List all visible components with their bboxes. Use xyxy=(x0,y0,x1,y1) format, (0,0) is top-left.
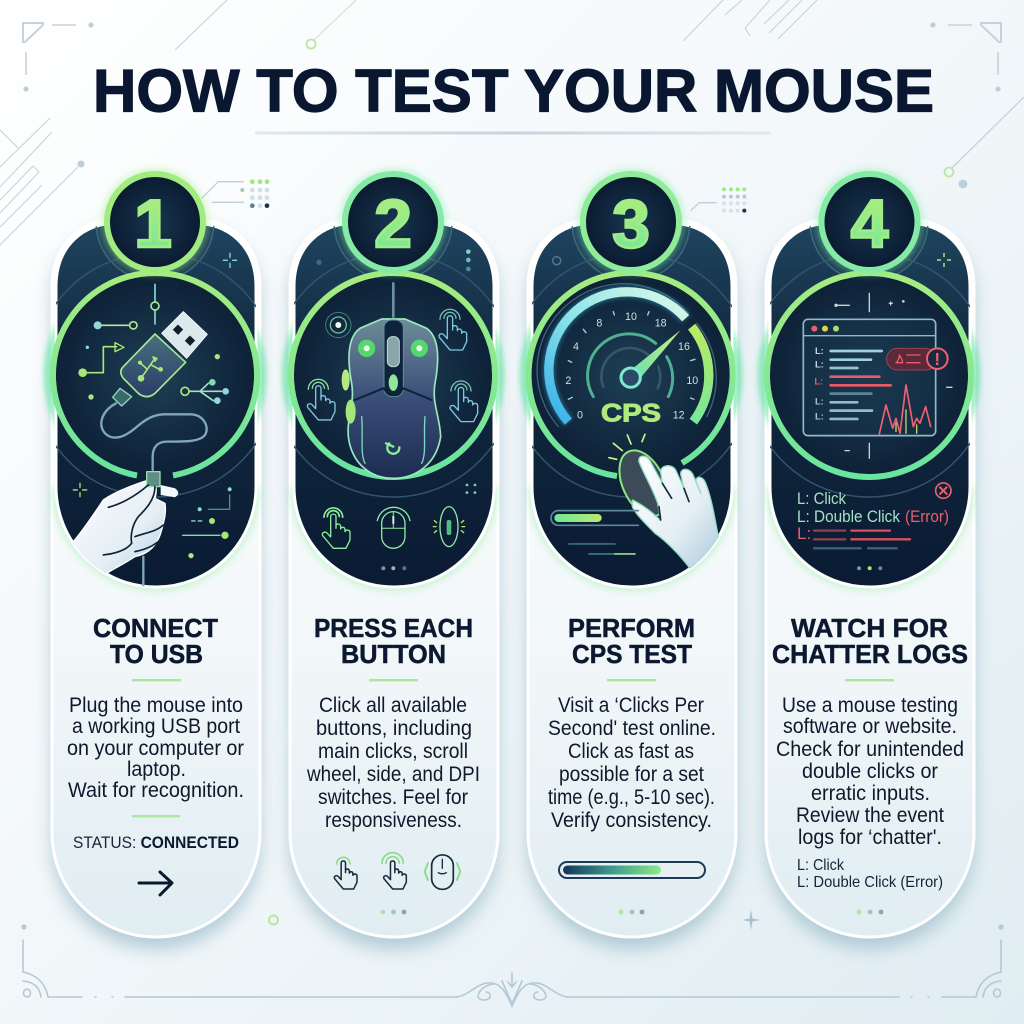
body text: step 1: a working USB port xyxy=(72,715,240,738)
chart: CPS speedometer gauge xyxy=(537,284,716,427)
body text: step 1: laptop. xyxy=(127,758,186,781)
heading: watch for chatter logs: CHATTER LOGS xyxy=(772,639,968,669)
icon: log window with error xyxy=(803,293,952,458)
body text: step 3: possible for a set xyxy=(559,763,704,786)
chart: CPS speedometer gauge: 16 xyxy=(678,341,690,353)
body text: step 3: time (e.g., 5-10 sec). xyxy=(548,786,715,809)
body text: step 4: Use a mouse testing xyxy=(782,694,958,717)
body text: step 4: software or website. xyxy=(783,715,957,738)
chart: CPS speedometer gauge: 18 xyxy=(655,318,667,330)
body text: step 4: double clicks or xyxy=(802,760,938,783)
heading: perform CPS test: PERFORM xyxy=(568,613,695,643)
body text: step 2: buttons, including xyxy=(316,717,472,740)
decoration: dots grid beside badge 3 xyxy=(691,187,746,213)
badge: number 4 xyxy=(816,169,922,275)
heading: watch for chatter logs xyxy=(772,613,968,669)
heading: connect to USB: CONNECT xyxy=(93,613,218,643)
icon: log window with error: ! xyxy=(934,349,940,369)
badge: number 4: 4 xyxy=(851,186,889,262)
heading: press each button: PRESS EACH xyxy=(314,613,473,643)
icon: arrow xyxy=(139,872,172,895)
badge: number 1: 1 xyxy=(134,186,172,262)
body text: step 4: Review the event xyxy=(796,804,944,827)
body text: step 4 xyxy=(776,694,964,849)
icon: error cross and log bars xyxy=(814,483,951,570)
body text: step 3: Second' test online. xyxy=(548,717,716,740)
icon: log window with error: L: xyxy=(815,359,824,369)
divider xyxy=(132,815,180,817)
decoration: bottom ring and sparkle xyxy=(269,910,760,930)
body text: step 1: Plug the mouse into xyxy=(69,694,243,717)
chart: CPS speedometer gauge: 0 xyxy=(577,409,583,421)
body text: step 2: responsiveness. xyxy=(325,809,462,832)
log text in dark panel: L: Double Click xyxy=(797,507,900,526)
chart: CPS speedometer gauge: 4 xyxy=(573,341,579,353)
log text in dark panel: L: xyxy=(797,524,811,543)
icon: log window with error: L: xyxy=(815,397,824,407)
icons: hands and mouse row xyxy=(334,853,460,889)
chart: CPS speedometer gauge: 8 xyxy=(596,318,602,330)
title: HOW TO TEST YOUR MOUSE xyxy=(93,58,934,124)
icon: log window with error: L: xyxy=(815,346,824,356)
badge: number 3: 3 xyxy=(612,186,650,262)
log sample text: L: Double Click (Error) xyxy=(797,874,943,891)
log text in dark panel: L: Click xyxy=(797,489,846,508)
heading: connect to USB xyxy=(93,613,218,669)
heading: press each button xyxy=(314,613,473,669)
decoration: bottom ornamental frame xyxy=(22,925,1003,1006)
heading: perform CPS test: CPS TEST xyxy=(572,639,692,669)
log text in dark panel xyxy=(797,489,949,543)
body text: step 4: logs for ‘chatter'. xyxy=(798,826,942,849)
chart: CPS speedometer gauge: 10 xyxy=(625,311,637,323)
pagination dots xyxy=(381,910,406,914)
divider xyxy=(369,679,418,681)
body text: step 3: Click as fast as xyxy=(568,740,694,763)
log sample text xyxy=(797,857,943,891)
badge: number 1 xyxy=(102,169,208,275)
body text: step 1: Wait for recognition. xyxy=(68,779,244,802)
status line: STATUS: CONNECTED xyxy=(73,834,239,852)
panel 4: watch for chatter logs xyxy=(747,163,991,949)
badge: number 3 xyxy=(578,169,684,275)
icon: hand clicking mouse xyxy=(551,257,719,568)
badge: number 2 xyxy=(340,169,446,275)
icon: USB plug illustration xyxy=(60,253,237,590)
chart: CPS speedometer gauge: 12 xyxy=(673,409,685,421)
panel 2: press each button xyxy=(271,163,515,949)
icon: log window with error: L: xyxy=(814,376,823,386)
progress bar xyxy=(559,862,705,878)
icon: gaming mouse illustration xyxy=(307,249,478,570)
pagination dots xyxy=(619,910,644,914)
body text: step 3: Verify consistency. xyxy=(551,809,712,832)
badge: number 2: 2 xyxy=(374,186,412,262)
title underline xyxy=(255,132,770,134)
divider xyxy=(845,679,894,681)
decoration: top-left corner circuit xyxy=(0,0,356,245)
divider xyxy=(132,679,181,681)
divider xyxy=(607,679,656,681)
body text: step 4: erratic inputs. xyxy=(811,782,930,805)
decoration: top-right corner circuit xyxy=(683,0,1024,188)
gauge label: CPS: CPS xyxy=(601,400,661,428)
icon: sparkle xyxy=(937,253,951,267)
heading: connect to USB: TO USB xyxy=(110,639,203,669)
heading: perform CPS test xyxy=(568,613,695,669)
heading: press each button: BUTTON xyxy=(341,639,446,669)
log text in dark panel: (Error) xyxy=(905,507,949,526)
decoration: dots grid beside badge 1 xyxy=(202,179,269,208)
body text: step 3 xyxy=(548,694,716,832)
panel 3: perform CPS test xyxy=(509,163,753,949)
chart: CPS speedometer gauge: 2 xyxy=(565,375,571,387)
chart: CPS speedometer gauge: 10 xyxy=(686,375,698,387)
log sample text: L: Click xyxy=(797,857,845,874)
body text: step 2: Click all available xyxy=(319,694,467,717)
body text: step 1: on your computer or xyxy=(67,737,244,760)
icon: log window with error: L: xyxy=(815,411,824,421)
body text: step 2 xyxy=(306,694,480,832)
body text: step 2: switches. Feel for xyxy=(318,786,468,809)
body text: step 1 xyxy=(67,694,244,802)
heading: watch for chatter logs: WATCH FOR xyxy=(791,613,948,643)
body text: step 3: Visit a ‘Clicks Per xyxy=(558,694,704,717)
panel 1: connect to USB xyxy=(33,163,277,949)
pagination dots xyxy=(857,910,883,914)
body text: step 2: wheel, side, and DPI xyxy=(306,763,480,786)
body text: step 2: main clicks, scroll xyxy=(318,740,468,763)
body text: step 4: Check for unintended xyxy=(776,738,964,761)
